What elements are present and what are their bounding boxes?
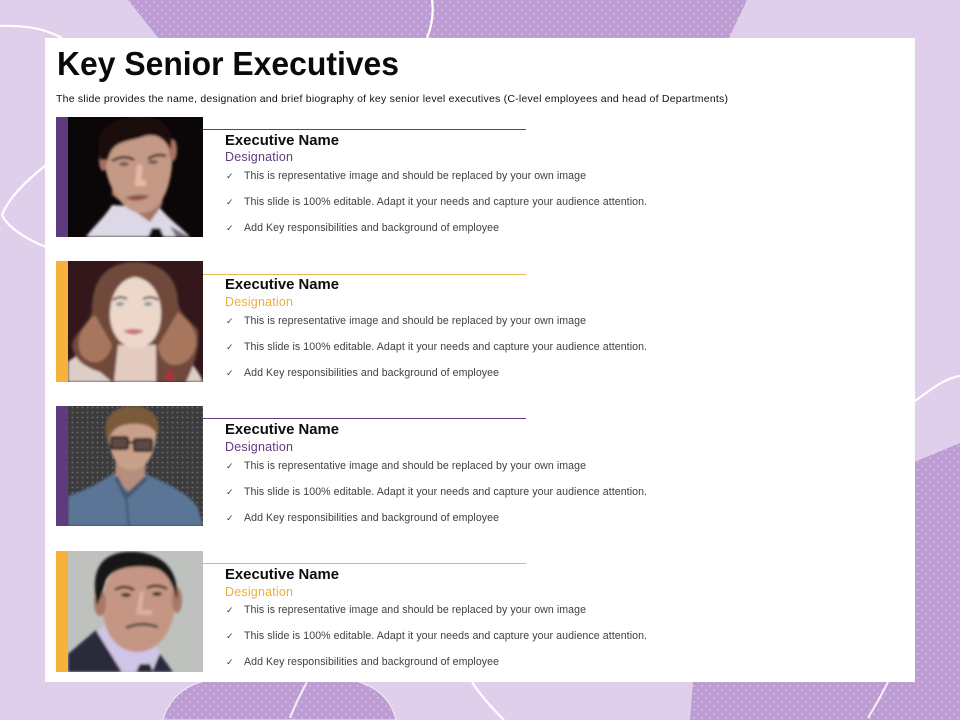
bullet list xyxy=(226,170,647,234)
bullet list: Add Key responsibilities and background of employee xyxy=(244,222,499,234)
accent bar: amber xyxy=(56,551,68,672)
bullet list: ✓ xyxy=(226,171,234,181)
subtitle: The slide provides the name, designation and brief biography of key senior level executives (C-level employees and head of Departments) xyxy=(56,93,728,105)
designation: Designation xyxy=(225,440,293,454)
rule xyxy=(203,418,526,419)
designation: Designation xyxy=(225,150,293,164)
name: Executive Name xyxy=(225,421,339,438)
bullet list: ✓ xyxy=(226,461,234,471)
bullet list: ✓ xyxy=(226,368,234,378)
bullet list: ✓ xyxy=(226,197,234,207)
name: Executive Name xyxy=(225,132,339,149)
bullet list: This slide is 100% editable. Adapt it your needs and capture your audience attention. xyxy=(244,486,647,498)
photo: man in pinstripe suit xyxy=(68,551,203,672)
bullet list: ✓ xyxy=(226,487,234,497)
accent bar: amber xyxy=(56,261,68,382)
bullet list: ✓ xyxy=(226,631,234,641)
bullet list: This slide is 100% editable. Adapt it your needs and capture your audience attention. xyxy=(244,630,647,642)
accent bar: purple xyxy=(56,117,68,237)
bullet list: ✓ xyxy=(226,605,234,615)
bullet list: This slide is 100% editable. Adapt it your needs and capture your audience attention. xyxy=(244,341,647,353)
accent bar: purple xyxy=(56,406,68,526)
title: Key Senior Executives xyxy=(57,45,399,82)
bullet list xyxy=(226,604,647,668)
designation: Designation xyxy=(225,295,293,309)
bullet list: ✓ xyxy=(226,223,234,233)
photo: woman with wavy hair xyxy=(68,261,203,382)
executive row 3 xyxy=(56,406,647,526)
designation: Designation xyxy=(225,585,293,599)
bullet list xyxy=(226,315,647,379)
rule xyxy=(203,129,526,130)
bullet list: ✓ xyxy=(226,342,234,352)
bullet list: This is representative image and should be replaced by your own image xyxy=(244,460,586,472)
executive row 2 xyxy=(56,261,647,382)
executive row 1 xyxy=(56,117,647,237)
bullet list: ✓ xyxy=(226,657,234,667)
rule xyxy=(203,274,526,275)
bullet list: Add Key responsibilities and background of employee xyxy=(244,367,499,379)
bullet list: This is representative image and should be replaced by your own image xyxy=(244,315,586,327)
executive row 4 xyxy=(56,551,647,672)
bullet list xyxy=(226,460,647,524)
photo: young man with glasses and denim shirt xyxy=(68,406,203,526)
bullet list: Add Key responsibilities and background of employee xyxy=(244,512,499,524)
bullet list: ✓ xyxy=(226,316,234,326)
bullet list: This is representative image and should be replaced by your own image xyxy=(244,170,586,182)
bullet list: This slide is 100% editable. Adapt it your needs and capture your audience attention. xyxy=(244,196,647,208)
name: Executive Name xyxy=(225,276,339,293)
bullet list: Add Key responsibilities and background of employee xyxy=(244,656,499,668)
bullet list: ✓ xyxy=(226,513,234,523)
photo: man with dark hair and tie xyxy=(68,117,203,237)
bullet list: This is representative image and should be replaced by your own image xyxy=(244,604,586,616)
rule xyxy=(203,563,526,564)
name: Executive Name xyxy=(225,566,339,583)
